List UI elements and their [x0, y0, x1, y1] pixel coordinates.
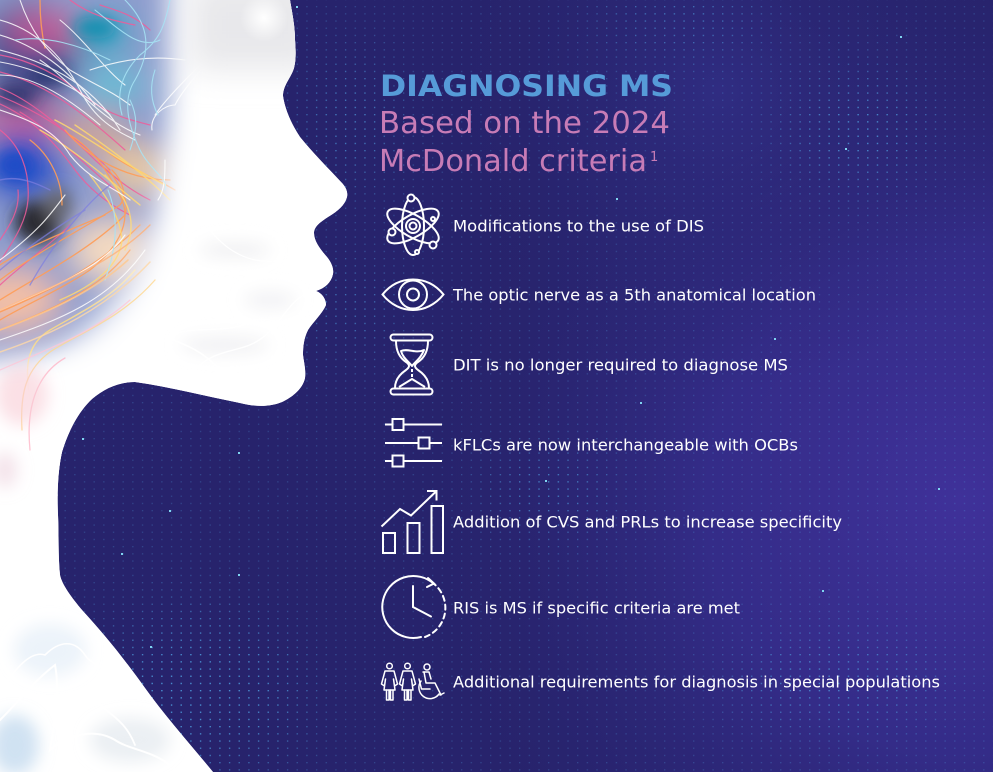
coloured light strands: [0, 0, 186, 379]
white nerve network: [0, 246, 251, 758]
icon: sliders: [385, 419, 442, 466]
white fade across the face: [0, 0, 348, 772]
label: DIT: DIT is no longer required to diagnose MS: [453, 356, 788, 374]
title: McDonald criteria: [379, 144, 647, 179]
label: CVS and PRLs: Addition of CVS and PRLs to increase specificity: [453, 512, 842, 532]
title: DIAGNOSING MS: [380, 69, 673, 103]
label: special populations: Additional requirements for diagnosis in special populations: [453, 672, 940, 692]
icon: people and wheelchair: [382, 663, 444, 700]
title: [379, 69, 673, 179]
item: DIS: [382, 194, 704, 255]
title: Based on the 2024: [379, 106, 670, 141]
hair colour fields: [0, 0, 170, 360]
label: optic nerve: The optic nerve as a 5th anatomical location: [452, 286, 816, 304]
face silhouette with neural light hair: [0, 0, 348, 772]
label: DIS: Modifications to the use of DIS: [453, 216, 704, 236]
icon: eye: [382, 280, 444, 310]
item: optic nerve: [382, 280, 816, 310]
icon: atom: [382, 194, 444, 255]
icon: rising bar chart: [382, 491, 443, 553]
label: kFLCs: kFLCs are now interchangeable with OCBs: [453, 436, 798, 454]
title: 1: [650, 150, 658, 165]
icon: clock: [382, 576, 445, 638]
item: DIT: [390, 334, 788, 394]
icon: hourglass: [390, 334, 432, 394]
item: CVS and PRLs: [382, 491, 842, 553]
pink and blue tints on the neck: [0, 242, 296, 772]
warm strands fading into the neck: [0, 225, 155, 450]
item: kFLCs: [385, 419, 798, 466]
item: special populations: [382, 663, 940, 700]
label: RIS: RIS is MS if specific criteria are met: [453, 598, 740, 618]
item: RIS: [382, 576, 740, 638]
